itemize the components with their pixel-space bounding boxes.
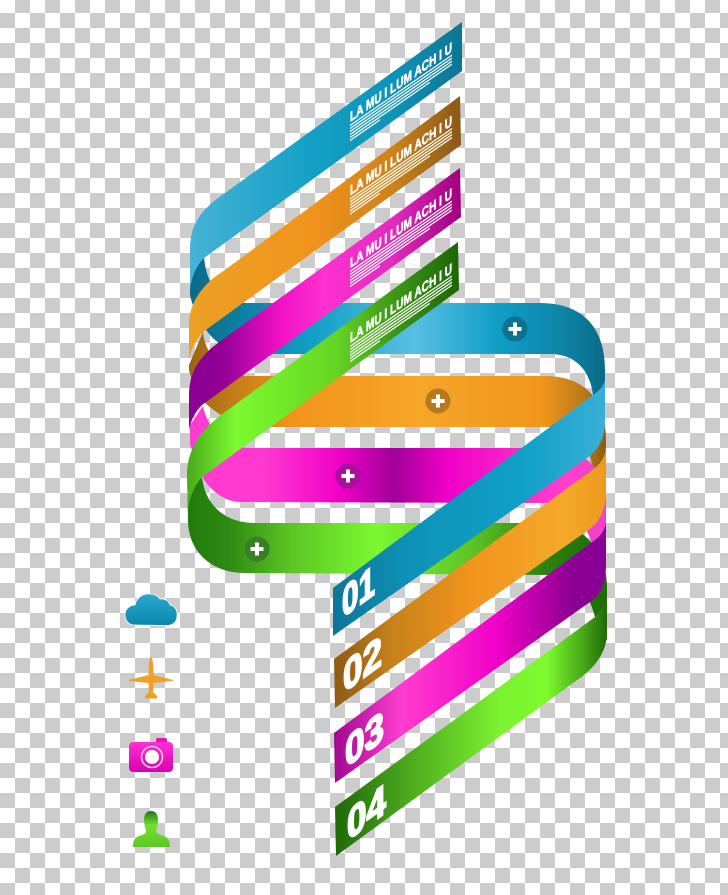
icon: cloud — [125, 594, 177, 626]
blue ribbon 01: 01 — [342, 556, 375, 628]
plus badge: blue — [502, 316, 528, 342]
magenta ribbon 03 — [334, 520, 606, 783]
green horizontal strip — [187, 470, 607, 640]
blue ribbon 01 — [333, 378, 605, 636]
orange top ribbon: LA MU I LUM ACH I U — [350, 113, 452, 199]
green ribbon 04 — [335, 585, 607, 856]
icon: airplane — [129, 656, 173, 698]
icon: camera — [129, 738, 173, 772]
orange ribbon 02: 02 — [343, 626, 382, 703]
blue top ribbon: LA MU I LUM ACH I U — [350, 40, 452, 126]
blue top ribbon — [190, 22, 462, 290]
top diagonal ribbons — [187, 22, 462, 510]
plus badge: magenta — [336, 464, 360, 488]
plus badge: green — [244, 536, 270, 562]
green top ribbon — [187, 242, 459, 510]
orange ribbon 02 — [334, 445, 606, 708]
plus badge: orange — [426, 388, 450, 414]
magenta horizontal strip — [190, 406, 606, 547]
icon: person — [133, 811, 170, 847]
magenta ribbon 03: 03 — [345, 701, 384, 778]
green top ribbon: LA MU I LUM ACH I U — [350, 261, 452, 347]
blue horizontal strip — [190, 256, 605, 400]
magenta top ribbon — [189, 168, 461, 430]
magenta top ribbon: LA MU I LUM ACH I U — [350, 186, 452, 272]
green ribbon 04: 04 — [347, 774, 386, 851]
back ribbon strips — [187, 256, 607, 640]
orange horizontal strip — [189, 332, 606, 475]
bottom diagonal ribbons — [333, 378, 607, 856]
orange top ribbon — [189, 96, 461, 360]
